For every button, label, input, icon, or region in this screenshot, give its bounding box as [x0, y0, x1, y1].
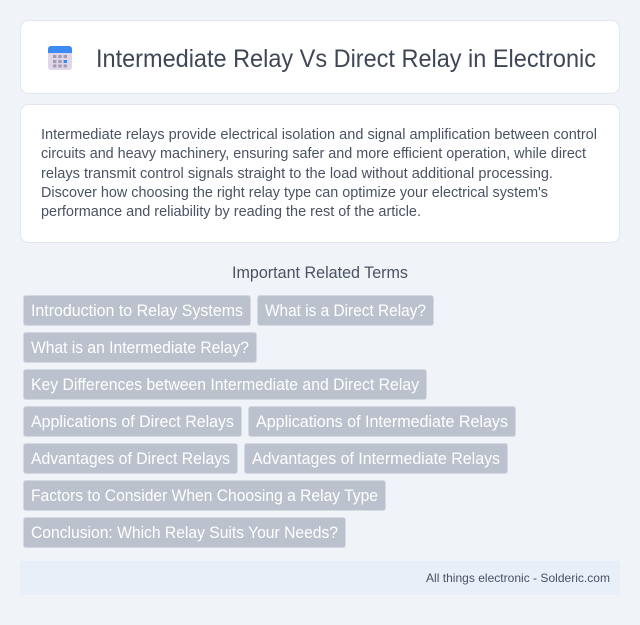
tag: applications of direct relays: [24, 406, 242, 436]
panel: title card: [20, 20, 620, 94]
tag: conclusion: Conclusion: Which Relay Suits Your Needs?: [31, 524, 338, 542]
tag: advantages of direct relays: Advantages of Direct Relays: [31, 450, 230, 468]
panel: introduction: Intermediate relays provide electrical isolation and signal amplification between control: [41, 127, 597, 143]
tag: introduction: [24, 296, 250, 326]
tag: applications of intermediate relays: Applications of Intermediate Relays: [256, 413, 508, 431]
tag: advantages of direct relays: [24, 444, 238, 474]
icon: calendar: [48, 46, 72, 70]
title: Intermediate Relay Vs Direct Relay in Electronic: [96, 45, 596, 73]
tag list: [24, 296, 516, 548]
tag: key differences: [24, 370, 426, 400]
tag: factors: [24, 480, 386, 510]
heading: important related terms: Important Related Terms: [232, 264, 408, 282]
panel: introduction: relays transmit control signals straight to the load without additional processing.: [41, 166, 553, 182]
tag: direct relay: What is a Direct Relay?: [265, 302, 426, 320]
tag: intermediate relay: What is an Intermediate Relay?: [31, 339, 249, 357]
footer: All things electronic - Solderic.com: [426, 571, 610, 585]
panel: introduction: [20, 104, 620, 242]
panel: introduction: circuits and heavy machinery, ensuring safer and more efficient operation, while direct: [41, 146, 586, 162]
tag: intermediate relay: [24, 332, 256, 362]
footer: [20, 561, 620, 595]
tag: factors: Factors to Consider When Choosing a Relay Type: [31, 487, 378, 505]
tag: applications of direct relays: Applications of Direct Relays: [31, 413, 234, 431]
tag: introduction: Introduction to Relay Systems: [31, 302, 243, 320]
panel: introduction: performance and reliability by reading the rest of the article.: [41, 204, 421, 220]
tag: direct relay: [258, 296, 434, 326]
tag: conclusion: [24, 518, 346, 548]
panel: introduction: Discover how choosing the right relay type can optimize your electrical system's: [41, 185, 548, 201]
tag: advantages of intermediate relays: Advantages of Intermediate Relays: [252, 450, 500, 468]
tag: advantages of intermediate relays: [244, 444, 508, 474]
tag: applications of intermediate relays: [248, 406, 516, 436]
tag: key differences: Key Differences between Intermediate and Direct Relay: [31, 376, 420, 394]
